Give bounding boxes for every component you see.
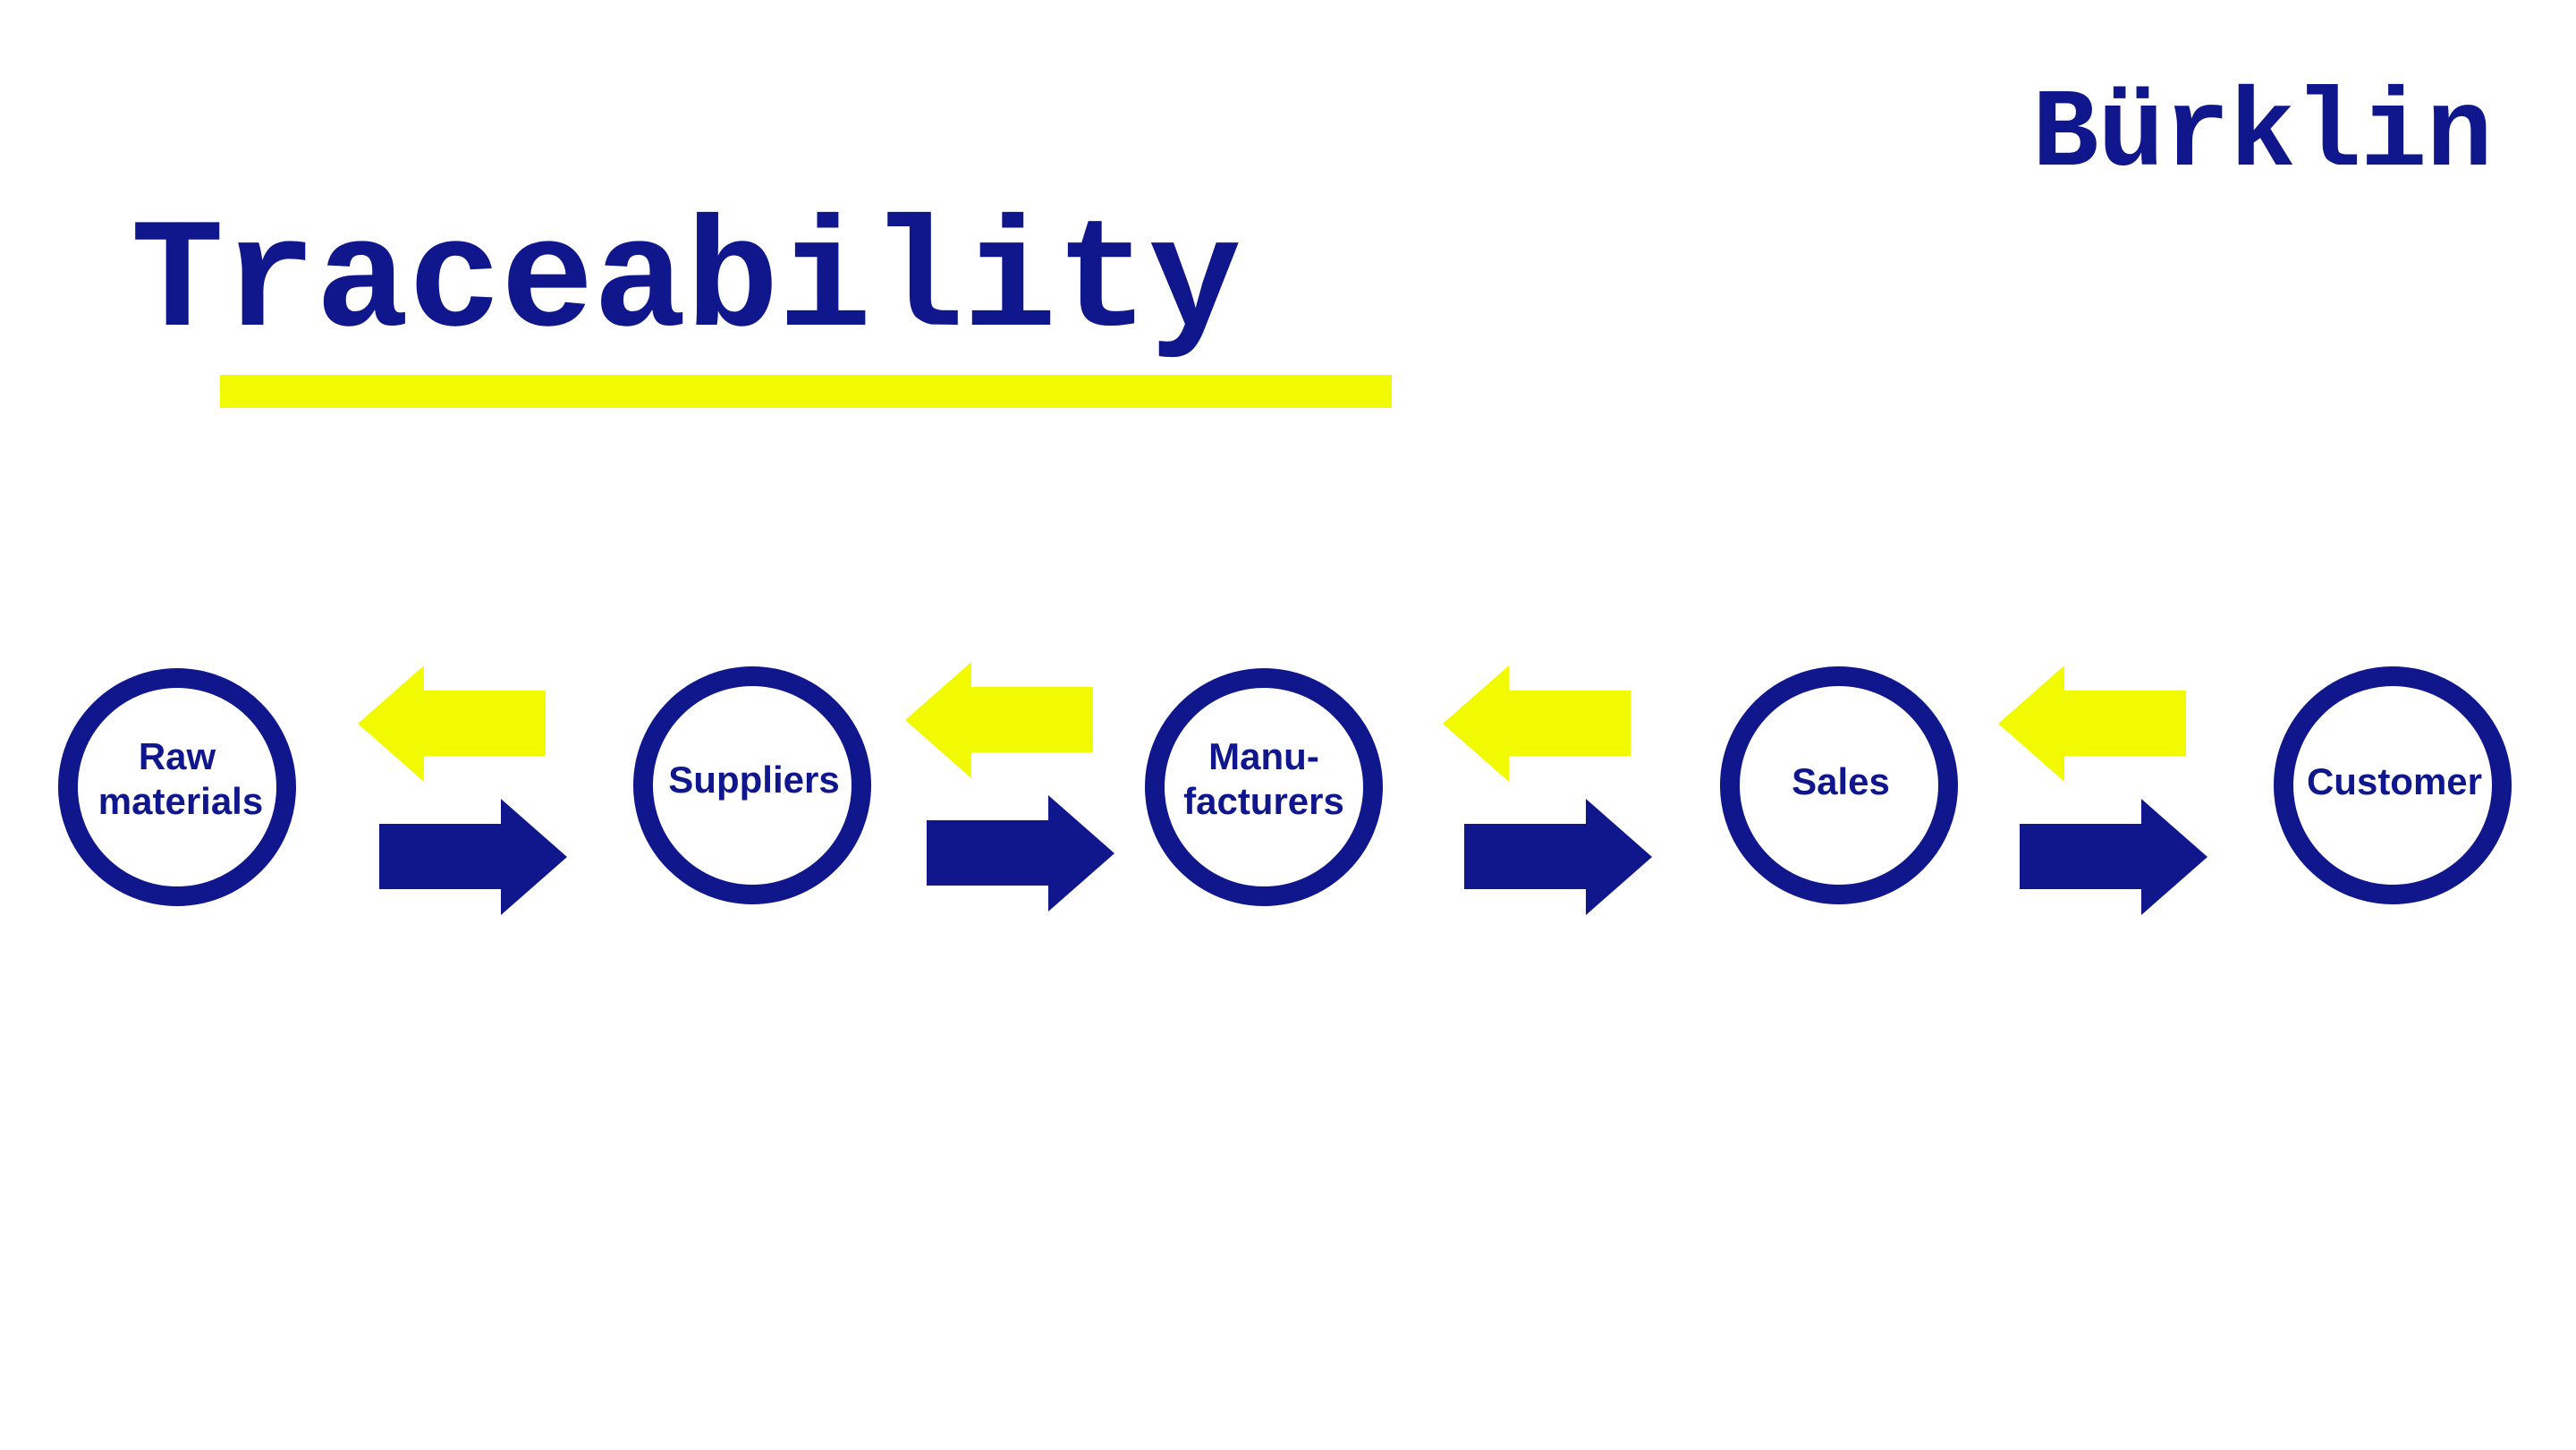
step: Manufacturers — [1155, 678, 1373, 896]
logo: Bürklin — [2032, 73, 2492, 199]
arrows pair 4 — [1998, 666, 2207, 915]
title underline — [220, 375, 1392, 408]
step: Raw materials: materials — [98, 780, 263, 822]
step: Sales: Sales — [1792, 760, 1890, 802]
arrows pair 3 — [1443, 666, 1652, 915]
arrows pair 1 — [358, 666, 567, 915]
step: Customer — [2284, 676, 2502, 895]
step: Customer: Customer — [2307, 760, 2482, 802]
step: Manufacturers: facturers — [1183, 780, 1344, 822]
step: Suppliers — [643, 676, 861, 895]
step: Raw materials: Raw — [139, 735, 216, 777]
step: Manufacturers: Manu- — [1208, 735, 1319, 777]
step: Raw materials — [68, 678, 286, 896]
arrows pair 2 — [905, 662, 1114, 912]
title: Traceability — [131, 196, 1241, 372]
step: Sales — [1730, 676, 1948, 895]
step: Suppliers: Suppliers — [668, 759, 840, 801]
